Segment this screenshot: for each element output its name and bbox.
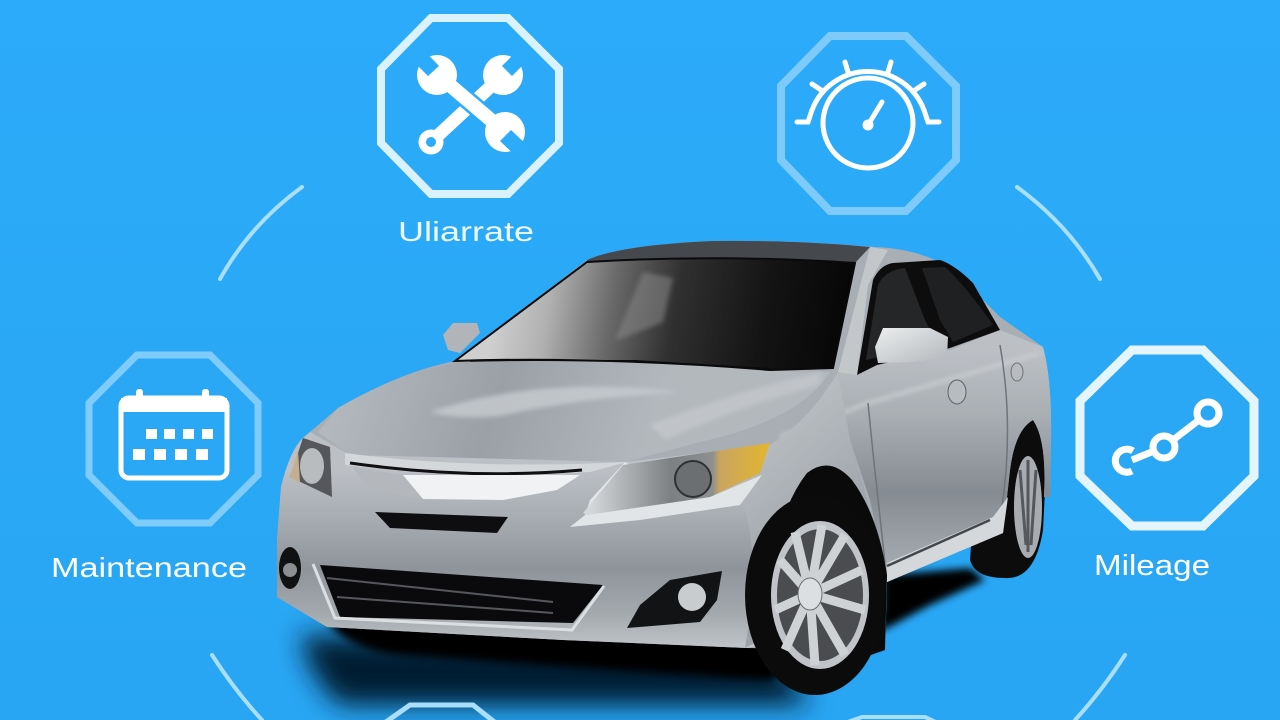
icon: mileage octagon [1080, 350, 1254, 526]
sill [887, 497, 1008, 582]
lower grille slats [327, 578, 553, 613]
front wheel tyre [745, 495, 885, 695]
rear wheel [970, 416, 1047, 578]
left fog bulb [283, 563, 297, 577]
bumper slot [375, 512, 508, 533]
underbody [327, 560, 890, 680]
front wheel rim [771, 521, 869, 669]
front fender [735, 372, 885, 648]
rear door handle [1011, 363, 1023, 381]
grille center white [403, 475, 580, 500]
car ground shadow [300, 568, 985, 705]
decorative ring arcs [212, 187, 1125, 720]
car body silhouette [277, 241, 1051, 650]
icon: gauge octagon [781, 36, 956, 211]
door handle [948, 380, 966, 404]
left headlight lens [300, 448, 324, 484]
left headlight [290, 438, 332, 497]
rim hub [798, 578, 822, 610]
icon: wrench and tools octagon [381, 18, 559, 194]
label: Uliarrate: Uliarrate [398, 216, 534, 247]
label: Mileage: Mileage [1094, 550, 1210, 582]
right headlight [583, 443, 770, 515]
wheel arch [770, 465, 887, 680]
icon: speedometer [797, 62, 939, 168]
label: Maintenance: Maintenance [51, 552, 247, 583]
left wing mirror [443, 323, 480, 353]
roof [587, 241, 870, 263]
lower grille chrome [313, 564, 604, 630]
character line [780, 353, 1040, 437]
icon: calendar [121, 389, 227, 478]
car illustration [277, 241, 1051, 695]
lower grille [320, 565, 603, 623]
sill dark line [887, 520, 990, 566]
grille black line [350, 463, 582, 474]
side door panel [838, 330, 1051, 582]
right fog lamp housing [627, 571, 722, 628]
rear side window [922, 267, 993, 342]
partial octagon bottom left [383, 705, 497, 720]
windshield reflection [615, 272, 673, 340]
right headlight trim [570, 462, 762, 527]
headlight projector [675, 461, 711, 497]
hood [318, 361, 830, 462]
hood highlight [430, 387, 680, 417]
grille chrome bar [345, 453, 627, 474]
front side window [866, 268, 938, 360]
hood crease [650, 372, 822, 440]
icon: linked nodes [1115, 402, 1219, 472]
rim spokes [775, 525, 865, 665]
windshield [455, 258, 855, 370]
left fog lamp [279, 547, 301, 589]
rim inner [777, 529, 863, 661]
icon: crossed wrenches [408, 45, 533, 162]
right fog lamp [678, 583, 706, 611]
icon: calendar octagon [89, 355, 258, 523]
A pillar [838, 247, 888, 375]
window frame [857, 260, 1000, 375]
front bumper [277, 432, 800, 648]
left headlight beige edge [290, 450, 300, 483]
grille left grey [352, 467, 420, 498]
door seam [868, 345, 1008, 563]
right wing mirror [875, 328, 948, 363]
wiper [470, 362, 770, 370]
partial octagon bottom right [842, 717, 940, 720]
